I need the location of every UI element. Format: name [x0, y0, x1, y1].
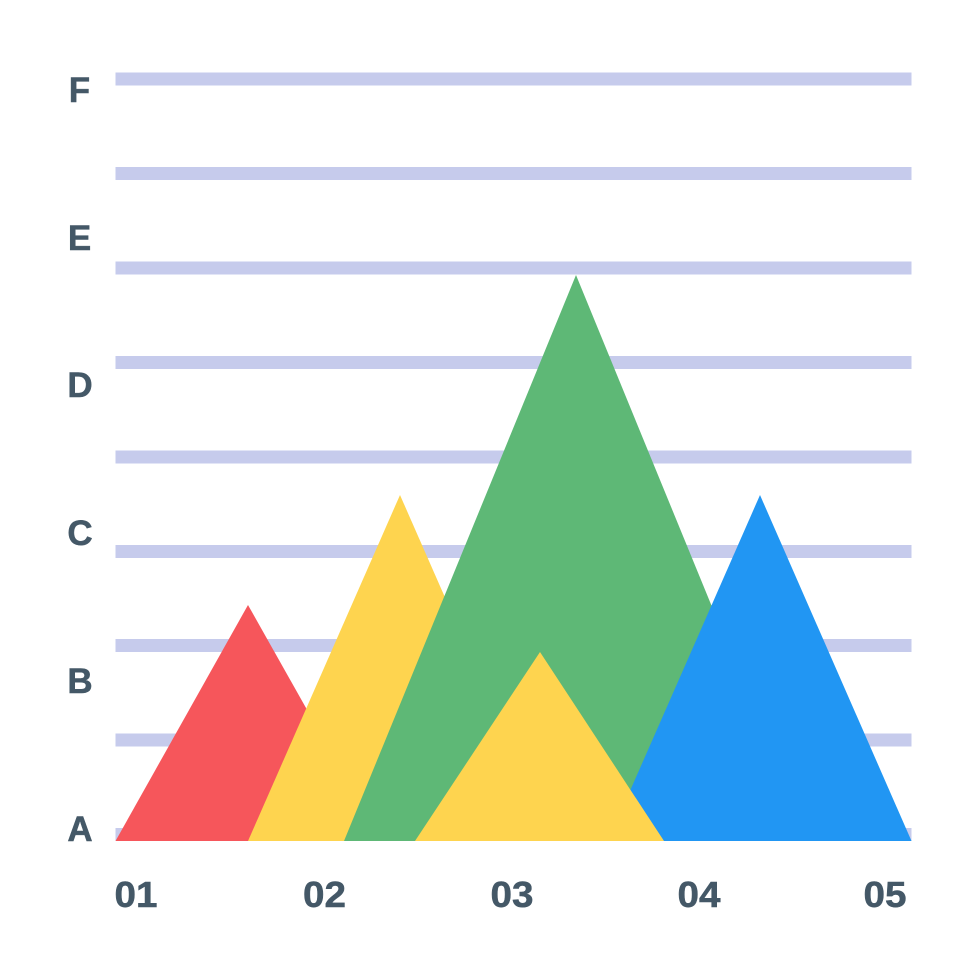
y-axis labels: A — [67, 810, 93, 849]
x-axis labels: 05 — [864, 874, 906, 915]
y-axis labels: C — [67, 514, 93, 553]
x-axis labels — [114, 874, 906, 915]
y-axis labels: E — [68, 219, 91, 258]
y-axis labels — [67, 71, 93, 849]
green triangle — [344, 275, 808, 841]
y-axis labels: D — [67, 366, 93, 405]
y-axis labels: B — [67, 662, 93, 701]
blue triangle — [608, 495, 912, 841]
x-axis labels: 02 — [303, 874, 346, 915]
red triangle — [116, 605, 381, 841]
x-axis labels: 01 — [114, 874, 158, 915]
yellow front triangle — [415, 652, 664, 841]
yellow back triangle — [248, 495, 552, 841]
horizontal grid lines — [116, 72, 912, 841]
y-axis labels: F — [69, 71, 90, 110]
x-axis labels: 03 — [490, 874, 534, 915]
x-axis labels: 04 — [678, 874, 720, 915]
